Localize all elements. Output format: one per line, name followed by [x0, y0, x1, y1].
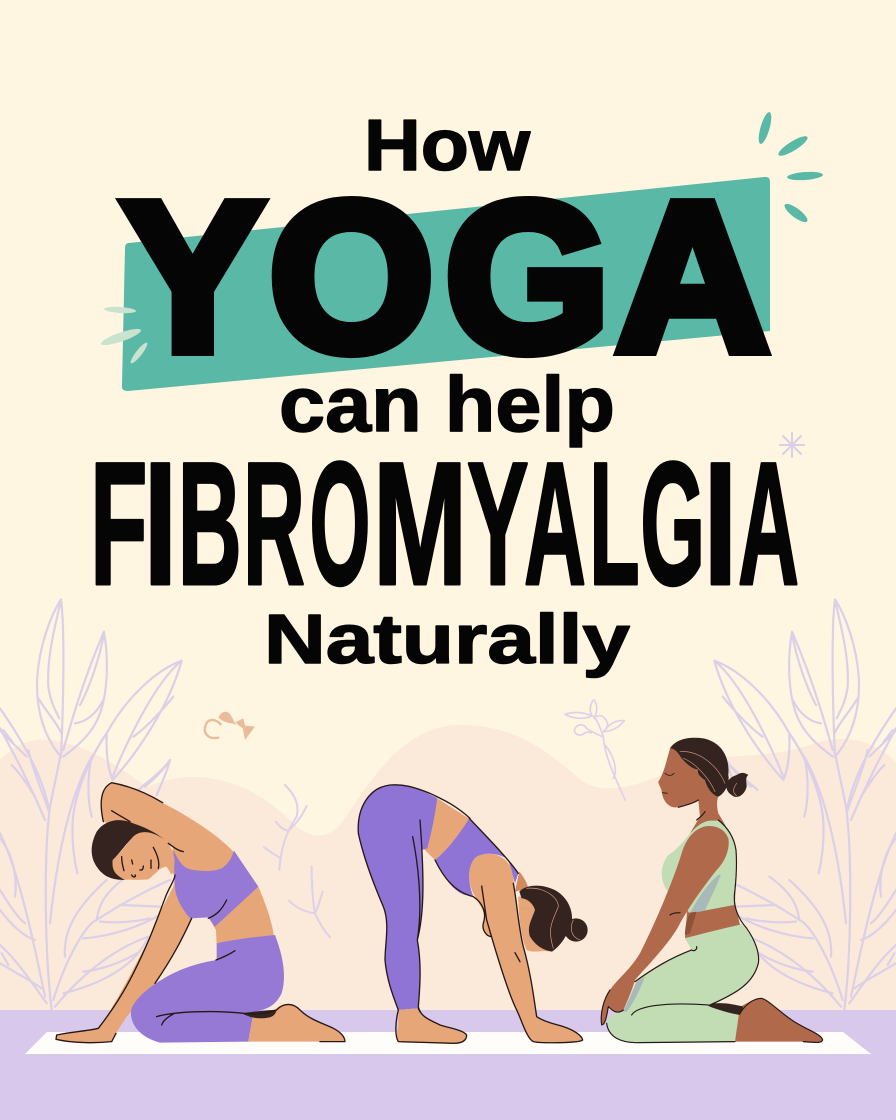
title: fibromyalgia: F	[90, 427, 148, 622]
doodle: lavender sprig	[565, 700, 625, 800]
pants	[131, 935, 284, 1043]
title: fibromyalgia: M	[373, 427, 467, 622]
midriff	[423, 798, 470, 860]
title: can help: can help	[279, 360, 615, 448]
bun	[564, 918, 588, 942]
title: fibromyalgia: I	[704, 427, 737, 622]
face	[518, 897, 567, 952]
title: fibromyalgia: G	[640, 427, 705, 622]
title: YOGA: YOGA	[122, 158, 769, 395]
hair	[519, 886, 572, 952]
outlines	[358, 785, 583, 1043]
background hills	[0, 725, 896, 1012]
sports top	[435, 818, 518, 897]
title: naturally: Naturally	[264, 600, 630, 678]
title: fibromyalgia: L	[589, 427, 640, 622]
teal highlight behind yoga	[122, 177, 770, 391]
leggings	[358, 785, 437, 1010]
doodle: peach squiggle	[205, 712, 255, 740]
foot	[735, 998, 823, 1042]
arm and hand	[469, 854, 583, 1043]
title: fibromyalgia: B	[178, 427, 242, 622]
neck	[515, 872, 528, 892]
leggings	[607, 924, 759, 1043]
skin: head, neck, torso	[658, 740, 740, 938]
yoga mat	[25, 1032, 871, 1054]
title: fibromyalgia: A	[524, 427, 586, 622]
title: How: How	[364, 106, 531, 186]
foot	[397, 1008, 467, 1043]
figure: forward-fold woman	[358, 785, 588, 1043]
left plant	[0, 599, 182, 1009]
sparkles pale green	[100, 306, 149, 365]
hand near chest	[475, 897, 492, 937]
title: fibromyalgia: Y	[467, 427, 529, 622]
foot	[248, 1004, 345, 1042]
floor	[0, 1010, 896, 1120]
arm and hand	[601, 826, 729, 1025]
doodle: lavender branch upper	[264, 785, 330, 937]
outlines	[601, 773, 823, 1043]
bun	[726, 773, 748, 797]
midriff shadow	[685, 912, 697, 935]
head skin	[112, 833, 175, 880]
title: fibromyalgia: I	[144, 427, 177, 622]
calf shadow	[708, 1003, 743, 1015]
sparkles teal	[756, 111, 823, 225]
green top	[662, 821, 737, 913]
title: fibromyalgia: R	[243, 427, 305, 622]
figure: side-bending woman	[56, 783, 345, 1043]
arm shadow	[690, 874, 721, 913]
calf shadow	[242, 1010, 277, 1018]
right plant	[714, 599, 896, 1009]
star doodle	[780, 433, 804, 457]
title: fibromyalgia: O	[310, 427, 370, 622]
figure: kneeling woman	[601, 738, 823, 1043]
skin: raised arm and torso	[56, 783, 274, 1043]
hair	[670, 738, 729, 797]
knee shadow	[623, 977, 645, 1012]
text: A	[738, 427, 799, 622]
outlines	[56, 783, 345, 1043]
bra	[173, 850, 258, 927]
hair	[92, 820, 165, 880]
